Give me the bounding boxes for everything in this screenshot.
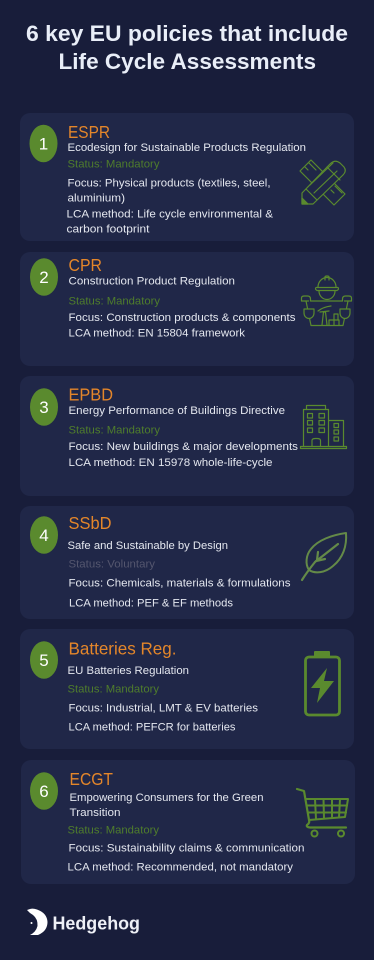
- LCA method: LCA method: EN 15804 framework: [68, 328, 245, 340]
- panel: CPR: [20, 252, 354, 366]
- LCA method: LCA method: Life cycle environmental &: [66, 209, 273, 221]
- number badge 5: 5: [39, 651, 49, 670]
- heading: ESPR: ESPR: [68, 122, 110, 142]
- panel: SSbD: [20, 506, 354, 619]
- heading: SSbD: SSbD: [68, 513, 112, 533]
- panel: Batteries Regulation: [20, 629, 354, 749]
- icon: leaf: [302, 533, 346, 580]
- status: Status: Mandatory: [68, 296, 160, 308]
- LCA method: carbon footprint: [66, 224, 150, 236]
- LCA method: LCA method: EN 15978 whole-life-cycle: [68, 457, 272, 469]
- number badge 1: [30, 125, 58, 162]
- LCA method: LCA method: Recommended, not mandatory: [68, 862, 293, 874]
- focus: Focus: New buildings & major developments: [68, 441, 298, 453]
- full name: EU Batteries Regulation: [68, 665, 189, 677]
- icon: ruler and pencil: [300, 160, 345, 205]
- heading: CPR: CPR: [68, 255, 102, 275]
- panel: ECGT: [21, 760, 355, 884]
- number badge 2: [30, 258, 58, 296]
- status: Status: Mandatory: [68, 684, 159, 696]
- LCA method: LCA method: PEFCR for batteries: [68, 722, 236, 734]
- heading: EPBD: EPBD: [68, 385, 113, 405]
- number badge 3: [30, 388, 58, 426]
- icon: hedgehog moon: [27, 909, 48, 935]
- panel: ESPR: [20, 113, 354, 241]
- full name: Construction Product Regulation: [68, 276, 235, 288]
- number badge 6: [30, 772, 58, 810]
- LCA method: [66, 209, 273, 236]
- icon: shopping cart: [297, 789, 348, 836]
- full name: Ecodesign for Sustainable Products Regulation: [68, 142, 306, 154]
- icon: construction worker with plan: [302, 276, 352, 326]
- full name: Transition: [70, 807, 120, 819]
- focus: Focus: Construction products & components: [68, 312, 296, 324]
- number badge 2: 2: [39, 268, 49, 287]
- focus: Focus: Physical products (textiles, steel,: [68, 178, 270, 190]
- full name: Safe and Sustainable by Design: [68, 540, 228, 552]
- focus: Focus: Chemicals, materials & formulations: [68, 578, 291, 590]
- heading: Batteries Reg.: Batteries Reg.: [68, 638, 176, 658]
- focus: aluminium): [68, 193, 125, 205]
- number badge 4: 4: [39, 526, 49, 545]
- logo: Hedgehog: [27, 909, 140, 935]
- heading: ECGT: ECGT: [70, 769, 113, 789]
- number badge 3: 3: [39, 398, 49, 417]
- focus: [68, 178, 270, 205]
- title: [26, 21, 348, 74]
- focus: Focus: Sustainability claims & communication: [68, 843, 304, 855]
- panel: EPBD: [20, 376, 354, 496]
- focus: Focus: Industrial, LMT & EV batteries: [68, 703, 258, 715]
- number badge 5: [30, 641, 58, 679]
- full name: Empowering Consumers for the Green: [70, 792, 264, 804]
- number badge 4: [30, 516, 58, 554]
- status: Status: Mandatory: [68, 159, 160, 171]
- title: Life Cycle Assessments: [58, 49, 316, 74]
- icon: battery: [306, 651, 340, 715]
- LCA method: LCA method: PEF & EF methods: [69, 598, 233, 610]
- logo: Hedgehog: Hedgehog: [52, 912, 140, 934]
- title: 6 key EU policies that include: [26, 21, 348, 46]
- number badge 1: 1: [39, 134, 48, 154]
- full name: Energy Performance of Buildings Directive: [68, 405, 285, 417]
- status: Status: Mandatory: [68, 425, 160, 437]
- number badge 6: 6: [39, 782, 49, 801]
- icon: buildings: [300, 406, 346, 448]
- full name: [70, 792, 264, 819]
- status: Status: Mandatory: [68, 825, 159, 837]
- status: Status: Voluntary: [68, 559, 155, 571]
